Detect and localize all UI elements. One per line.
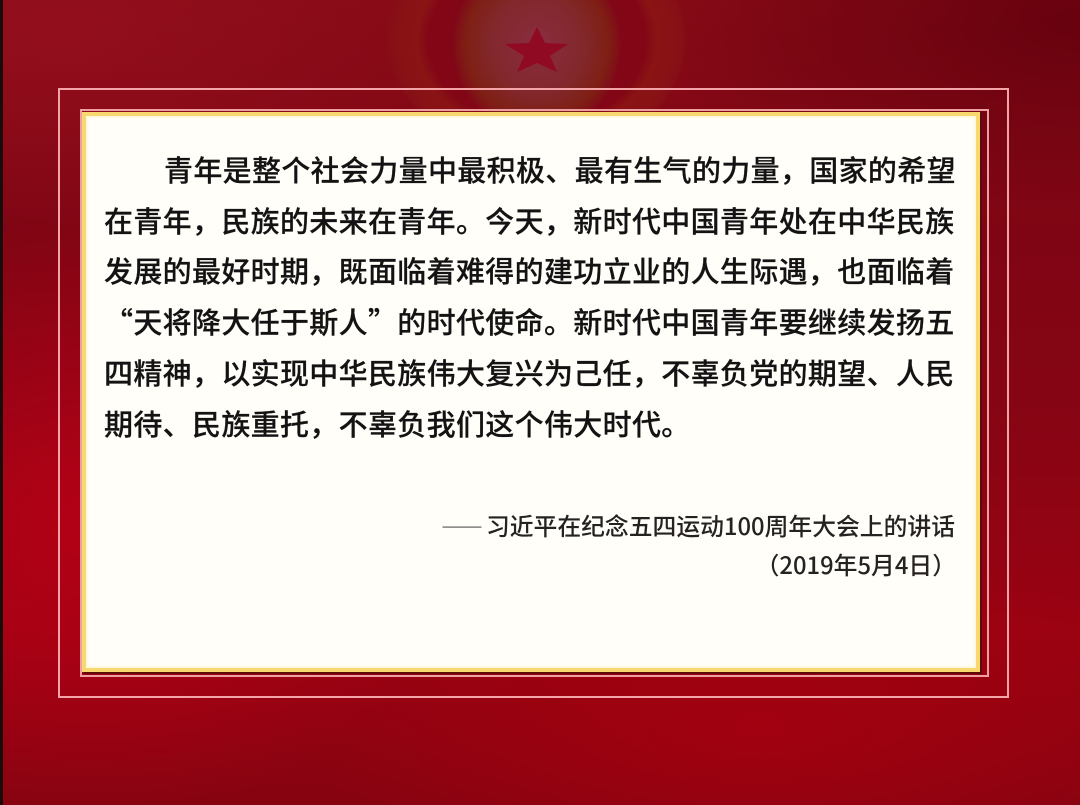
icon: star: [505, 27, 568, 72]
text block: quote: 发展的最好时期，既面临着难得的建功立业的人生际遇，也面临着: [104, 249, 955, 291]
text block: quote: 四精神，以实现中华民族伟大复兴为己任，不辜负党的期望、人民: [104, 351, 955, 393]
text block: quote: “天将降大任于斯人”的时代使命。新时代中国青年要继续发扬五: [104, 300, 955, 342]
outer frame: [58, 88, 1009, 698]
inner frame: [80, 109, 989, 677]
text block: quote: 期待、民族重托，不辜负我们这个伟大时代。: [104, 402, 691, 444]
left black edge: [0, 0, 3, 805]
text block: quote: 青年是整个社会力量中最积极、最有生气的力量，国家的希望: [164, 148, 956, 190]
attribution: （2019年5月4日）: [756, 546, 956, 581]
attribution: [441, 507, 956, 581]
emblem glow with star: [403, 0, 676, 112]
text block: quote: [104, 148, 956, 444]
attribution: ——习近平在纪念五四运动100周年大会上的讲话: [441, 507, 955, 542]
panel: quotation: [82, 112, 980, 672]
text block: quote: 在青年，民族的未来在青年。今天，新时代中国青年处在中华民族: [104, 199, 955, 241]
